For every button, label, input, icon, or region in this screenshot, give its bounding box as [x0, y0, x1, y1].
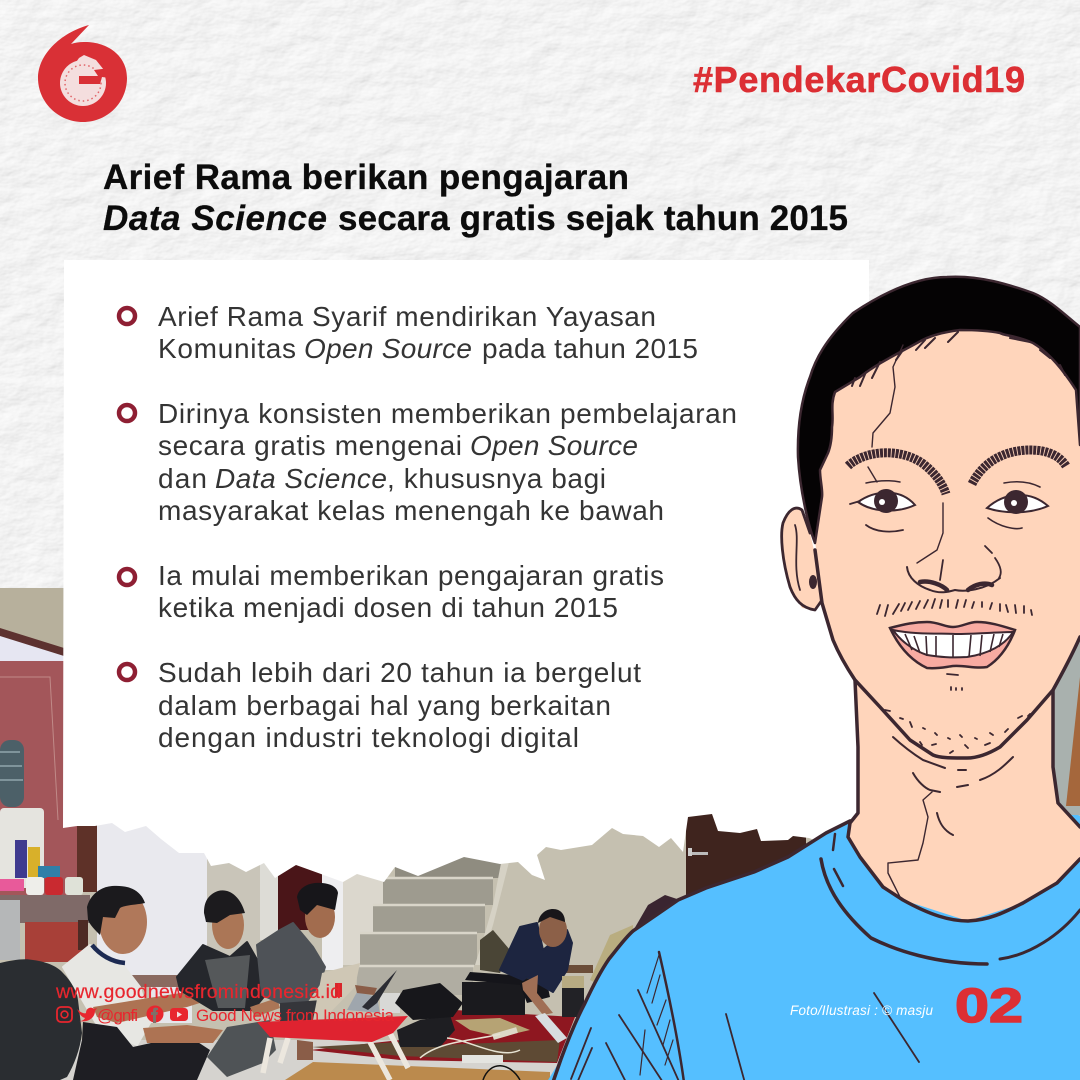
illustration: right eye [987, 482, 1048, 529]
footer: website and social media: www.goodnewsfromindonesia.id [55, 981, 341, 1003]
heading: secara gratis sejak tahun 2015 [338, 199, 848, 238]
logo: Good News from Indonesia [38, 25, 127, 122]
person seated right [257, 883, 338, 1007]
heading [103, 158, 848, 238]
icon: bullet ring 1 [119, 308, 135, 324]
text block: bullet 2: Dirinya konsisten memberikan pembelajaran [158, 398, 737, 429]
text block: bullet 1: Open Source [304, 333, 472, 364]
paper background [0, 0, 1080, 600]
text block: bullet 2: , khususnya bagi [387, 463, 606, 494]
text block: bullet 3 [119, 560, 664, 623]
base walls [0, 588, 1080, 1080]
panel: white torn paper card [63, 260, 869, 882]
heading: Data Science [103, 199, 327, 238]
text block: bullet 3: ketika menjadi dosen di tahun 2015 [158, 592, 618, 623]
illustration: ear [781, 508, 825, 610]
icon: facebook [146, 1006, 164, 1023]
footer: website and social media [55, 981, 395, 1025]
heading: Arief Rama berikan pengajaran [103, 158, 629, 197]
illustration: neck [848, 680, 1080, 921]
text block: bullet 2: secara gratis mengenai [158, 430, 462, 461]
icon: instagram [57, 1007, 72, 1022]
illustration: hair [798, 277, 1080, 543]
photo credit: Foto/Ilustrasi : © masju [790, 1003, 933, 1018]
text block: bullet 2: Open Source [470, 430, 638, 461]
icon: bullet ring 4 [119, 664, 135, 680]
illustration: nose [907, 546, 1001, 592]
illustration: Arief Rama portrait [545, 277, 1080, 1080]
text block: bullet 4: Sudah lebih dari 20 tahun ia bergelut [158, 657, 641, 688]
red table [257, 1016, 408, 1080]
illustration: moustache [877, 599, 1032, 616]
icon: twitter [77, 1008, 97, 1021]
illustration: eyebrows [848, 450, 1066, 494]
hijab person [620, 895, 680, 960]
illustration: cracked lines [868, 345, 943, 897]
icon: bullet ring 2 [119, 405, 135, 421]
text block: bullet 2: dan [158, 463, 207, 494]
icon: youtube [170, 1008, 188, 1021]
text block: bullet 1: Arief Rama Syarif mendirikan Yayasan [158, 301, 656, 332]
illustration: chin stubble [885, 674, 1030, 753]
text block: bullet 2 [119, 398, 737, 526]
illustration: photo wall at right of the neck [1050, 640, 1080, 815]
icon: bullet ring 3 [119, 569, 135, 585]
text block: bullet 1: Komunitas [158, 333, 296, 364]
illustration: left eye [850, 481, 915, 532]
bags and black laptop [395, 930, 525, 1047]
page number: 02 [955, 980, 1023, 1033]
photo: group of people working on laptops [0, 588, 1080, 1080]
person seated middle [177, 890, 280, 1077]
text block: bullet 1: pada tahun 2015 [482, 333, 698, 364]
hashtag: #PendekarCovid19 [693, 59, 1025, 100]
illustration: blue shirt [545, 808, 1080, 1080]
illustration: throat lines [893, 737, 1013, 835]
footer: website and social media: @gnfi [97, 1006, 138, 1025]
illustration: face [815, 310, 1080, 758]
text block: bullet 1 [119, 301, 698, 364]
text block: bullet 2: Data Science [215, 463, 387, 494]
footer: website and social media: Good News from Indonesia [196, 1006, 395, 1025]
person on the floor right [465, 909, 572, 1015]
person seated left [0, 886, 223, 1080]
illustration: smiling mouth [890, 622, 1015, 668]
text block: bullet 2: masyarakat kelas menengah ke bawah [158, 495, 664, 526]
text block: bullet 3: Ia mulai memberikan pengajaran gratis [158, 560, 664, 591]
laptops and hand [280, 963, 397, 1022]
text block: bullet 4: dalam berbagai hal yang berkaitan [158, 690, 611, 721]
floor items [420, 976, 584, 1080]
text block: bullet 4 [119, 657, 641, 753]
floor and carpet [0, 1040, 580, 1080]
staircase [357, 855, 510, 995]
text block: bullet 4: dengan industri teknologi digital [158, 722, 579, 753]
